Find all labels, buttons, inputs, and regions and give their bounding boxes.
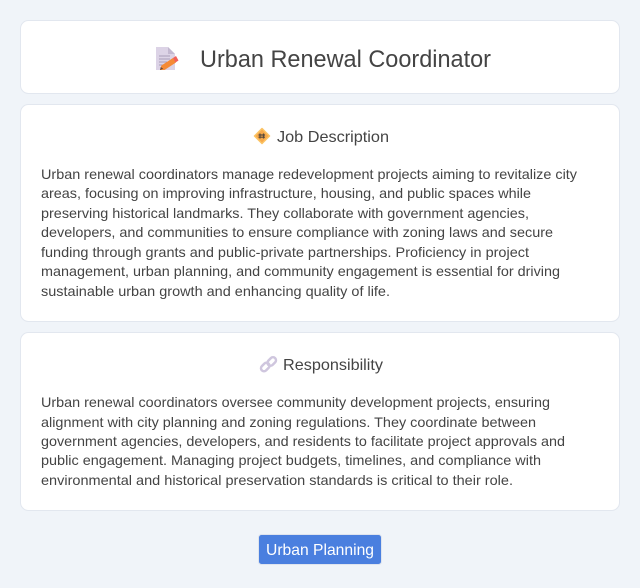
text block: responsibility: government agencies, developers, and residents to facilitate project approvals and [41, 433, 565, 449]
text block: job description: sustainable urban growth and enhancing quality of life. [41, 283, 390, 299]
title: Urban Renewal Coordinator [200, 46, 491, 73]
text block: responsibility: public engagement. Managing project budgets, timelines, and compliance with [41, 452, 541, 468]
text block: responsibility: environmental and historical preservation standards is critical to their role. [41, 472, 513, 488]
heading: responsibility: Responsibility [283, 357, 383, 374]
tag: urban planning: Urban Planning [266, 542, 374, 559]
text block: job description: management, urban planning, and community engagement is essential for driving [41, 263, 560, 279]
text block: responsibility: alignment with city planning and zoning regulations. They coordinate between [41, 414, 536, 430]
icon: chain link [260, 356, 277, 372]
text block: job description: Urban renewal coordinators manage redevelopment projects aiming to revitalize city [41, 166, 577, 182]
tag: urban planning [258, 534, 382, 564]
text block: responsibility: Urban renewal coordinators oversee community development projects, ensuring [41, 394, 550, 410]
icon: document with pencil [156, 47, 178, 70]
text block: job description: developers, and communities to ensure compliance with zoning laws and secure [41, 224, 553, 240]
panel: responsibility [20, 332, 620, 510]
text block: responsibility [41, 394, 565, 488]
icon: orange diamond sign [254, 128, 270, 144]
text block: job description [41, 166, 577, 299]
panel: title card [20, 20, 620, 94]
heading: job description: Job Description [277, 129, 389, 146]
text block: job description: areas, focusing on improving infrastructure, housing, and public spaces while [41, 185, 531, 201]
panel: job description [20, 104, 620, 322]
text block: job description: preserving historical landmarks. They collaborate with government agencies, [41, 205, 529, 221]
text block: job description: funding through grants and public-private partnerships. Proficiency in project [41, 244, 529, 260]
